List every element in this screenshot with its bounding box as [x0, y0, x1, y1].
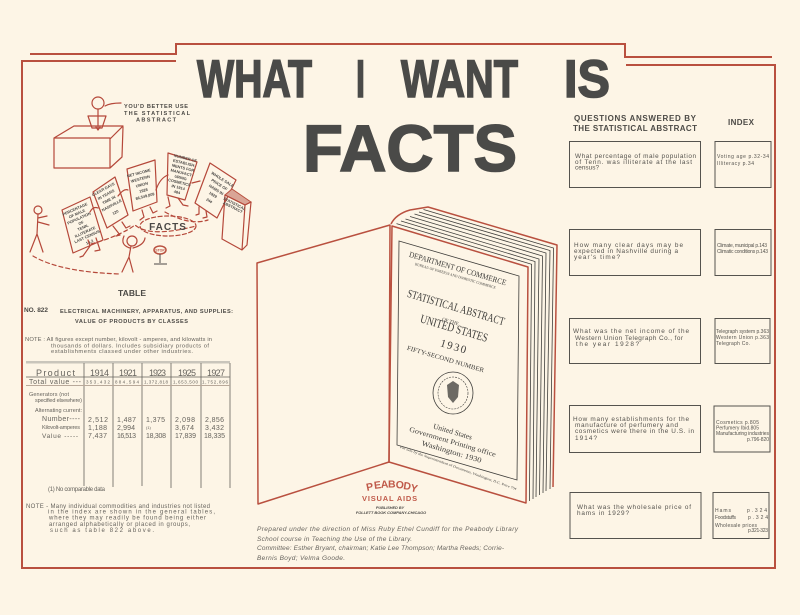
question 1: [570, 142, 700, 188]
book covers: [257, 207, 557, 504]
index 5: p.324: [747, 508, 767, 514]
note above table: NOTE : All figures except number, kilovolt - amperes, and kilowatts in: [25, 337, 212, 343]
speech text: YOU'D BETTER USE: [124, 104, 188, 110]
index 4: Manufacturing industries: [716, 431, 770, 437]
question 1: of Tenn. was illiterate at the last: [575, 159, 692, 166]
data table: 2,994: [117, 425, 135, 432]
data table: Alternating current:: [35, 408, 82, 414]
card arms and legs: [80, 175, 207, 257]
title: WHAT: [197, 50, 312, 109]
fact card: illiteracy: TENN.: [77, 223, 89, 232]
fact card: clear days: 120: [111, 208, 119, 216]
fact card: net income: [126, 160, 158, 211]
fact card: illiteracy: PERCENTAGE: [62, 201, 88, 217]
data table: 1925: [178, 368, 196, 378]
index 3: Telegraph system p.363: [716, 329, 769, 335]
table footnote: (1) No comparable data: [48, 487, 106, 493]
fact card: clear days: TIME IN: [101, 194, 116, 205]
title page text: Washington: 1930: [421, 438, 483, 465]
data table: 2,856: [205, 417, 224, 424]
title page text: Government Printing office: [408, 425, 497, 459]
index 5: Wholesale prices: [715, 523, 758, 529]
speech text: [124, 104, 191, 124]
questions heading: QUESTIONS ANSWERED BY: [574, 114, 697, 123]
question 4: 1914?: [575, 435, 597, 442]
title page text: [399, 250, 518, 492]
fact card: illiteracy: POPULATION: [66, 211, 92, 226]
title page border: [397, 241, 519, 480]
fact card: illiteracy: LAST CENSUS: [74, 228, 101, 244]
fact card: establishments: MANUFACT-: [170, 167, 194, 178]
data table: 884,594: [115, 380, 139, 384]
data table: 1,188: [88, 425, 107, 432]
title page text: OF THE: [441, 318, 459, 327]
fact card: illiteracy: [61, 197, 103, 253]
book pages block: [396, 210, 554, 501]
fact card: ham price: [195, 163, 236, 218]
department seal: [433, 372, 473, 414]
data table: 18,335: [204, 433, 225, 440]
data table: Generators (not: [29, 392, 69, 398]
table heading: ELECTRICAL MACHINERY, APPARATUS, AND SUPPLIES:: [60, 309, 233, 315]
question 1: census?: [575, 164, 599, 172]
speech text: THE STATISTICAL: [124, 111, 191, 117]
title: WANT: [401, 50, 518, 109]
fact card: illiteracy: ILLITERATE: [74, 225, 97, 239]
bottom note: arranged alphabetically or placed in groups,: [49, 522, 190, 528]
index 5: p.321-323: [748, 528, 768, 534]
question 3: Western Union Telegraph Co., for: [575, 335, 684, 342]
data table: 1927: [207, 368, 225, 378]
credits: Prepared under the direction of Miss Ruby Ethel Cundiff for the Peabody Library: [257, 526, 519, 533]
note above table: thousands of dollars. Includes subsidiary products of: [51, 344, 209, 350]
title page text: For sale by the Superintendent of Documents, Washington, D.C. Price 75¢: [399, 445, 518, 492]
data table: 1,487: [117, 417, 136, 424]
fact card: ham price: WHOLE SALE: [210, 170, 235, 189]
data table: 1,653,500: [173, 380, 198, 384]
index 3: Western Union p.363: [716, 335, 769, 341]
data table: 1914: [90, 368, 109, 378]
question 2: How many clear days may be: [574, 242, 683, 249]
data table: [26, 361, 230, 488]
data table: 17,839: [175, 433, 196, 440]
index 3: Telegraph Co.: [716, 341, 750, 347]
index 5: p.324: [748, 515, 768, 521]
fact card: establishments: IN 1914: [171, 183, 186, 191]
credits: Committee: Esther Bryant, chairman; Katie Lee Thompson; Martha Reeds; Corrie-: [257, 545, 505, 552]
question 1: What percentage of male population: [575, 153, 696, 160]
index 5: Hams: [715, 508, 732, 514]
table heading: TABLE: [118, 288, 146, 298]
data table: 1923: [149, 368, 166, 378]
note above table: [25, 337, 212, 355]
credits: [257, 526, 519, 562]
index 1: Illiteracy p.34: [717, 161, 754, 167]
data table: Number----: [42, 416, 81, 423]
data table: (1): [146, 425, 152, 430]
fact card: clear days: [91, 177, 128, 228]
fact card: ham price: 24¢: [205, 197, 214, 205]
bottom note: NOTE - Many individual commodities and industries not listed: [26, 504, 210, 510]
fact card: ham price: 1929: [208, 190, 219, 200]
index 2: Climate, municipal p.143: [717, 243, 767, 249]
data table: 2,098: [175, 417, 195, 424]
data table: specified elsewhere): [35, 398, 82, 404]
note above table: establishments classed under other industries.: [51, 349, 193, 355]
fact card: illiteracy: OF MALE: [68, 208, 86, 219]
publisher imprint: PEABODY: [365, 478, 419, 495]
fact card: establishments: [165, 153, 198, 200]
data table: Kilovolt-amperes: [42, 425, 80, 431]
stop sign: STOP: [155, 248, 165, 252]
dashed path and connectors: [33, 212, 208, 274]
question 5: What was the wholesale price of: [577, 504, 691, 511]
index 5: Foodstuffs: [715, 515, 736, 521]
publisher imprint: VISUAL AIDS: [362, 494, 418, 503]
index 5: [713, 492, 769, 538]
credits: School course in Teaching the Use of the Library.: [257, 536, 412, 543]
title page text: FIFTY-SECOND NUMBER: [406, 345, 485, 374]
question 2: [570, 230, 700, 276]
title page text: United States: [432, 422, 473, 442]
data table: Product: [36, 368, 75, 378]
open book illustration: [257, 207, 557, 504]
data table: 3,674: [175, 425, 194, 432]
question 3: the year 1928?: [576, 341, 639, 348]
fact card: illiteracy: 13.2: [85, 238, 95, 246]
publisher imprint: [356, 478, 426, 515]
question 5: [570, 492, 701, 538]
credits: Bernis Boyd; Velma Goode.: [257, 555, 345, 562]
title: [197, 50, 610, 185]
fact card: establishments: COSMETICS: [168, 177, 192, 188]
fact card: clear days: IN YEARS: [97, 188, 116, 201]
table heading: [24, 288, 233, 325]
title page text: UNITED STATES: [419, 312, 490, 345]
index 2: Climatic conditions p.143: [717, 249, 768, 255]
question 5: hams in 1929?: [577, 510, 629, 517]
index heading: INDEX: [728, 118, 755, 127]
fact card: net income: NET INCOME: [126, 167, 152, 179]
questions heading: THE STATISTICAL ABSTRACT: [573, 124, 697, 133]
question 3: [570, 318, 700, 364]
bottom note: in the index are shown in the general tables,: [48, 510, 215, 516]
table heading: NO. 822: [24, 307, 48, 314]
title page text: 1930: [439, 337, 469, 357]
small book: [221, 189, 251, 250]
question 4: [570, 406, 700, 452]
facts oval: [140, 216, 196, 236]
fact card: net income: UNION: [135, 180, 149, 189]
data table: 1,375: [146, 417, 165, 424]
index 1: [715, 142, 771, 188]
data table: 18,308: [146, 433, 166, 440]
question 4: How many establishments for the: [573, 416, 689, 423]
fact card: ham price: HAMS IN: [208, 183, 225, 196]
fact card: establishments: MENTS FOR: [171, 163, 195, 173]
fact card: establishments: URING: [174, 174, 187, 181]
data table: Total value ---: [29, 379, 82, 386]
data table: 2,512: [88, 417, 108, 424]
index 4: Perfumery Ibid.805: [716, 426, 759, 432]
fact card: illiteracy: OF: [77, 219, 85, 226]
data table: 7,437: [88, 433, 107, 440]
fact card: net income: $6,549,809: [135, 191, 156, 201]
fact card: establishments: NUMBER OF: [173, 153, 198, 163]
title page text: BUREAU OF FOREIGN AND DOMESTIC COMMERCE: [414, 262, 497, 290]
small book: ABSTRACT: [222, 200, 244, 215]
title: FACTS: [303, 111, 517, 185]
fact card: net income: WESTERN: [130, 174, 151, 184]
data table: 1,752,896: [202, 380, 228, 384]
bottom note: where they may readily be found being either: [48, 516, 206, 522]
data table: 16,513: [117, 433, 136, 440]
data table: Value -----: [42, 433, 78, 440]
fact card: clear days: CLEAR DAYS: [91, 181, 116, 197]
index 4: p.796-820: [747, 437, 769, 443]
speech text: ABSTRACT: [136, 118, 177, 124]
fact card: ham price: PRICE OF: [210, 177, 229, 192]
small book: STATISTICAL: [223, 196, 247, 212]
index 3: [715, 318, 770, 364]
figure at desk: [54, 97, 123, 168]
fact card: establishments: ESTABLISH-: [172, 158, 197, 168]
index 2: [715, 230, 771, 276]
fact card: clear days: NASHVILLE: [101, 198, 123, 212]
title page text: DEPARTMENT OF COMMERCE: [408, 250, 507, 287]
bottom note: such as table 822 above.: [50, 528, 154, 534]
data table: 1,372,818: [144, 380, 168, 384]
index 4: Cosmetics p.805: [716, 420, 759, 426]
facts oval: FACTS: [149, 222, 187, 233]
data table: 1921: [119, 368, 137, 378]
title: I: [356, 50, 365, 109]
question 2: year's time?: [574, 254, 620, 261]
bottom note: [26, 504, 215, 534]
question 2: expected in Nashville during a: [574, 248, 678, 255]
stop sign: [154, 246, 167, 264]
question 3: What was the net income of the: [573, 328, 689, 335]
title page text: STATISTICAL ABSTRACT: [406, 288, 506, 328]
publisher imprint: FOLLETT BOOK COMPANY-CHICAGO: [356, 510, 426, 515]
index 1: Voting age p.32-34: [717, 154, 769, 160]
stick figures: [30, 206, 145, 272]
table heading: VALUE OF PRODUCTS BY CLASSES: [75, 319, 188, 325]
question 4: cosmetics were there in the U.S. in: [575, 428, 694, 435]
data table: 3,432: [205, 425, 224, 432]
question 4: manufacture of perfumery and: [575, 422, 678, 429]
publisher imprint: PUBLISHED BY: [376, 506, 405, 510]
fact card: establishments: 484: [173, 189, 182, 195]
index 4: [714, 406, 770, 452]
data table: 353,432: [86, 380, 110, 384]
title: IS: [564, 50, 610, 109]
fact card: net income: 1928: [139, 187, 149, 194]
illustration: people, fact cards and book: [30, 97, 251, 274]
questions heading: [573, 114, 697, 133]
